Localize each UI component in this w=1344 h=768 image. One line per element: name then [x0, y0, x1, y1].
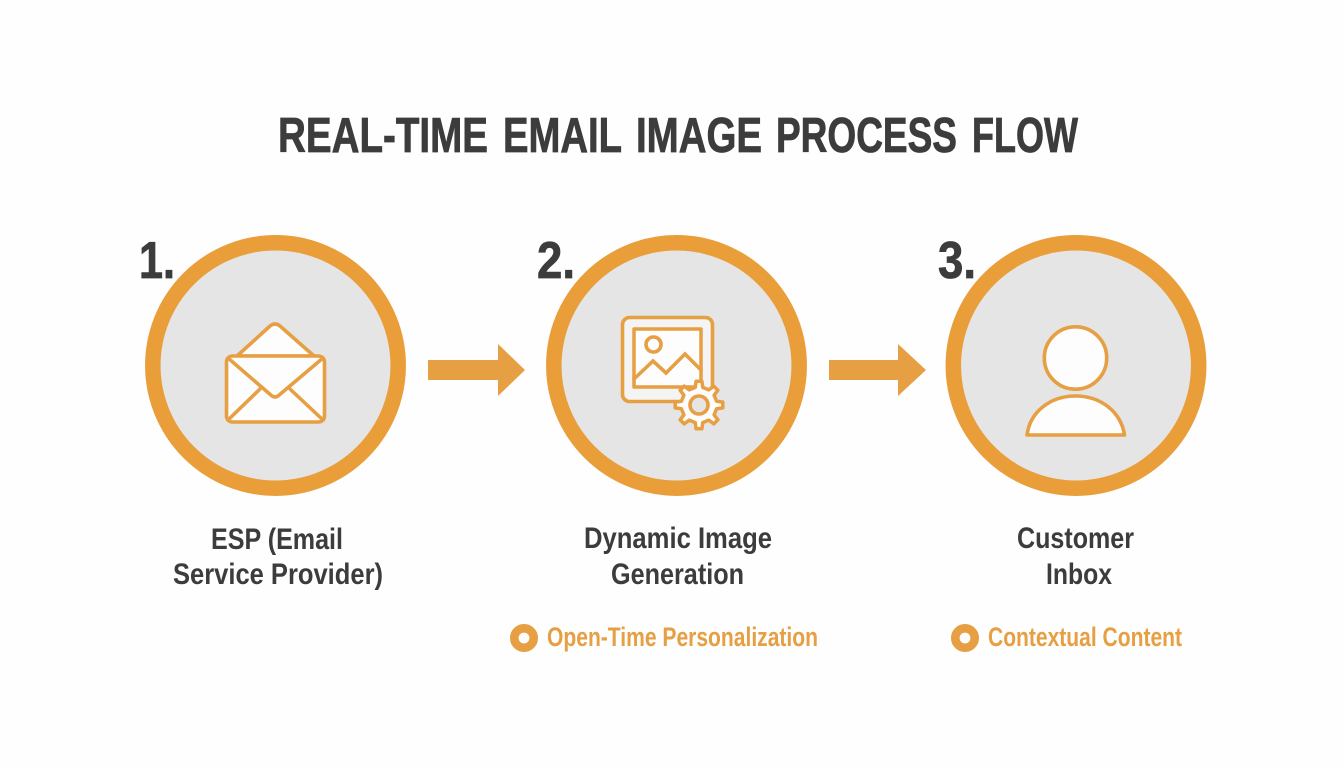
step label 3: Inbox: [1046, 558, 1112, 591]
panel: step 1 ESP: [139, 232, 398, 591]
panel: step 2 Dynamic Image Generation: [514, 232, 818, 652]
title: PROCESS: [776, 109, 957, 163]
step label 1: [173, 523, 383, 591]
icon: open envelope: [226, 324, 324, 422]
step circle 1: [153, 243, 398, 488]
step circle 2: [554, 243, 799, 488]
panel: step 3 Customer Inbox: [938, 232, 1199, 652]
title: REAL-TIME: [278, 109, 488, 163]
step label 2: Dynamic Image: [584, 522, 772, 555]
title: IMAGE: [636, 109, 762, 163]
step number 2: 2.: [537, 232, 575, 290]
step number 3: 3.: [938, 232, 976, 290]
step label 2: [584, 522, 772, 591]
icon: image with gear: [622, 318, 723, 429]
title: FLOW: [972, 109, 1079, 163]
step number 1: 1.: [139, 232, 175, 290]
step label 2: Generation: [611, 558, 744, 591]
title: [278, 109, 1079, 163]
icon: person: [1027, 327, 1124, 435]
step label 1: Service Provider): [173, 558, 383, 591]
step circle 3: [953, 243, 1199, 488]
step label 3: [1017, 522, 1134, 591]
arrow: step 1 to step 2: [428, 344, 525, 396]
title: EMAIL: [503, 109, 622, 163]
arrow: step 2 to step 3: [829, 344, 926, 396]
callout: contextual content: Contextual Content: [988, 622, 1182, 652]
callout: open-time personalization: Open-Time Personalization: [547, 622, 818, 652]
step label 1: ESP (Email: [211, 523, 343, 556]
step label 3: Customer: [1017, 522, 1134, 555]
